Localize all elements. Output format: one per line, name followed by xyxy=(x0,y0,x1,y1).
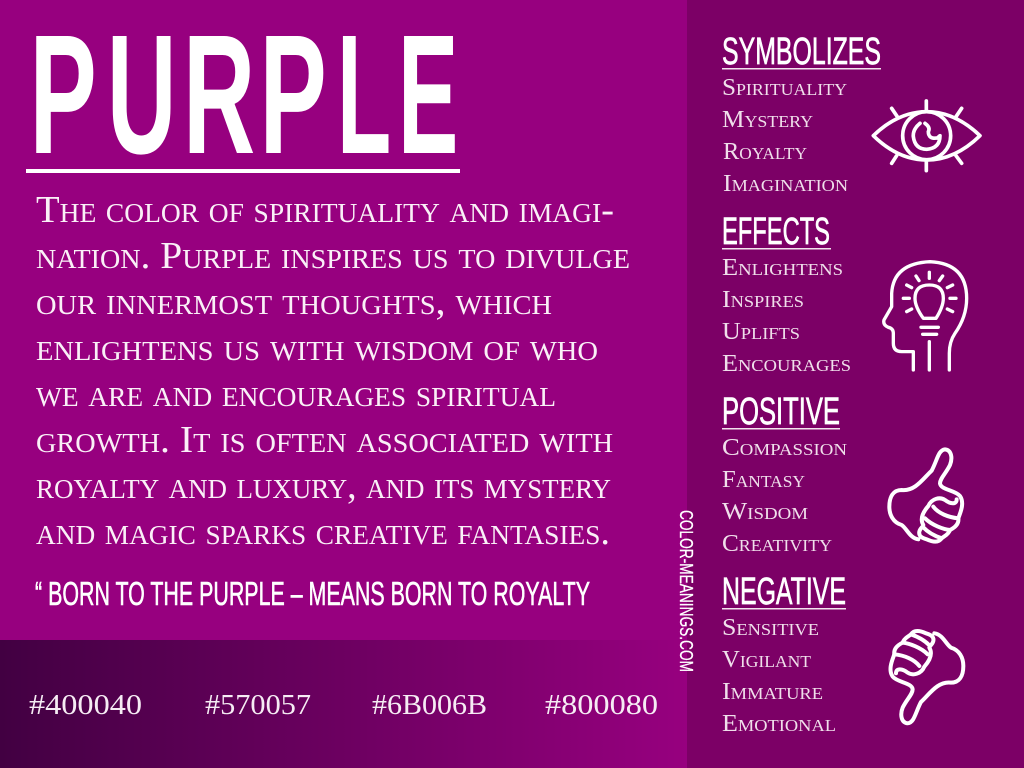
icon: thumbs up xyxy=(889,449,962,542)
title underline xyxy=(26,169,460,173)
list: effects: Encourages xyxy=(722,351,851,377)
description text block: The color of spirituality and imagi- xyxy=(36,189,614,231)
description text block: our innermost thoughts, which xyxy=(36,281,552,323)
list: negative: Sensitive xyxy=(722,615,819,641)
heading: positive: POSITIVE xyxy=(722,391,840,433)
icon: thumbs down xyxy=(890,631,963,723)
list: negative: Vigilant xyxy=(722,647,812,673)
description text block: and magic sparks creative fantasies. xyxy=(36,511,610,553)
description text block: we are and encourages spiritual xyxy=(36,373,556,415)
list: effects: Enlightens xyxy=(722,255,843,281)
title: U xyxy=(107,0,176,190)
list: negative: Emotional xyxy=(722,711,836,737)
quote line: “ BORN TO THE PURPLE – MEANS BORN TO ROYALTY xyxy=(35,575,590,612)
colour code 6B006B: #6B006B xyxy=(372,690,487,721)
description text block: enlightens us with wisdom of who xyxy=(36,327,598,369)
title: E xyxy=(398,0,458,189)
panel: positive xyxy=(722,391,847,557)
list: positive: Wisdom xyxy=(722,499,808,525)
description text block: royalty and luxury, and its mystery xyxy=(36,465,611,507)
heading: negative: NEGATIVE xyxy=(722,571,846,613)
title: P xyxy=(30,0,97,189)
list: negative xyxy=(722,615,836,737)
list: negative: Immature xyxy=(722,679,823,705)
title: L xyxy=(337,0,391,189)
list: symbolizes: Imagination xyxy=(723,171,848,197)
heading: effects: EFFECTS xyxy=(722,211,830,253)
title: R xyxy=(183,0,255,190)
panel: negative xyxy=(722,571,846,737)
panel: main purple background xyxy=(0,0,687,768)
colour code 400040: #400040 xyxy=(29,690,142,721)
description text block: nation. Purple inspires us to divulge xyxy=(36,235,630,277)
list: positive xyxy=(722,435,847,557)
panel: right sidebar xyxy=(687,0,1024,768)
list: positive: Creativity xyxy=(722,531,832,557)
list: effects: Inspires xyxy=(722,287,804,313)
panel: effects xyxy=(722,211,851,377)
list: symbolizes xyxy=(722,75,848,197)
list: effects: Uplifts xyxy=(722,319,800,345)
colour code 800080: #800080 xyxy=(545,690,658,721)
description text block xyxy=(36,189,630,553)
title: P xyxy=(260,0,327,189)
list: effects xyxy=(722,255,851,377)
list: symbolizes: Mystery xyxy=(722,107,813,133)
colour code 570057: #570057 xyxy=(205,690,311,721)
icon: eye xyxy=(873,101,980,171)
description text block: growth. It is often associated with xyxy=(36,419,613,461)
list: positive: Fantasy xyxy=(722,467,805,493)
list: symbolizes: Royalty xyxy=(723,139,807,165)
panel: symbolizes xyxy=(722,31,881,197)
list: positive: Compassion xyxy=(722,435,847,461)
icon: head with light bulb xyxy=(884,262,967,370)
heading: symbolizes: SYMBOLIZES xyxy=(722,31,881,73)
panel: colour code band xyxy=(0,640,687,768)
title xyxy=(30,0,458,190)
list: symbolizes: Spirituality xyxy=(722,75,847,101)
vertical website credit: COLOR-MEANINGS.COM xyxy=(676,510,696,672)
